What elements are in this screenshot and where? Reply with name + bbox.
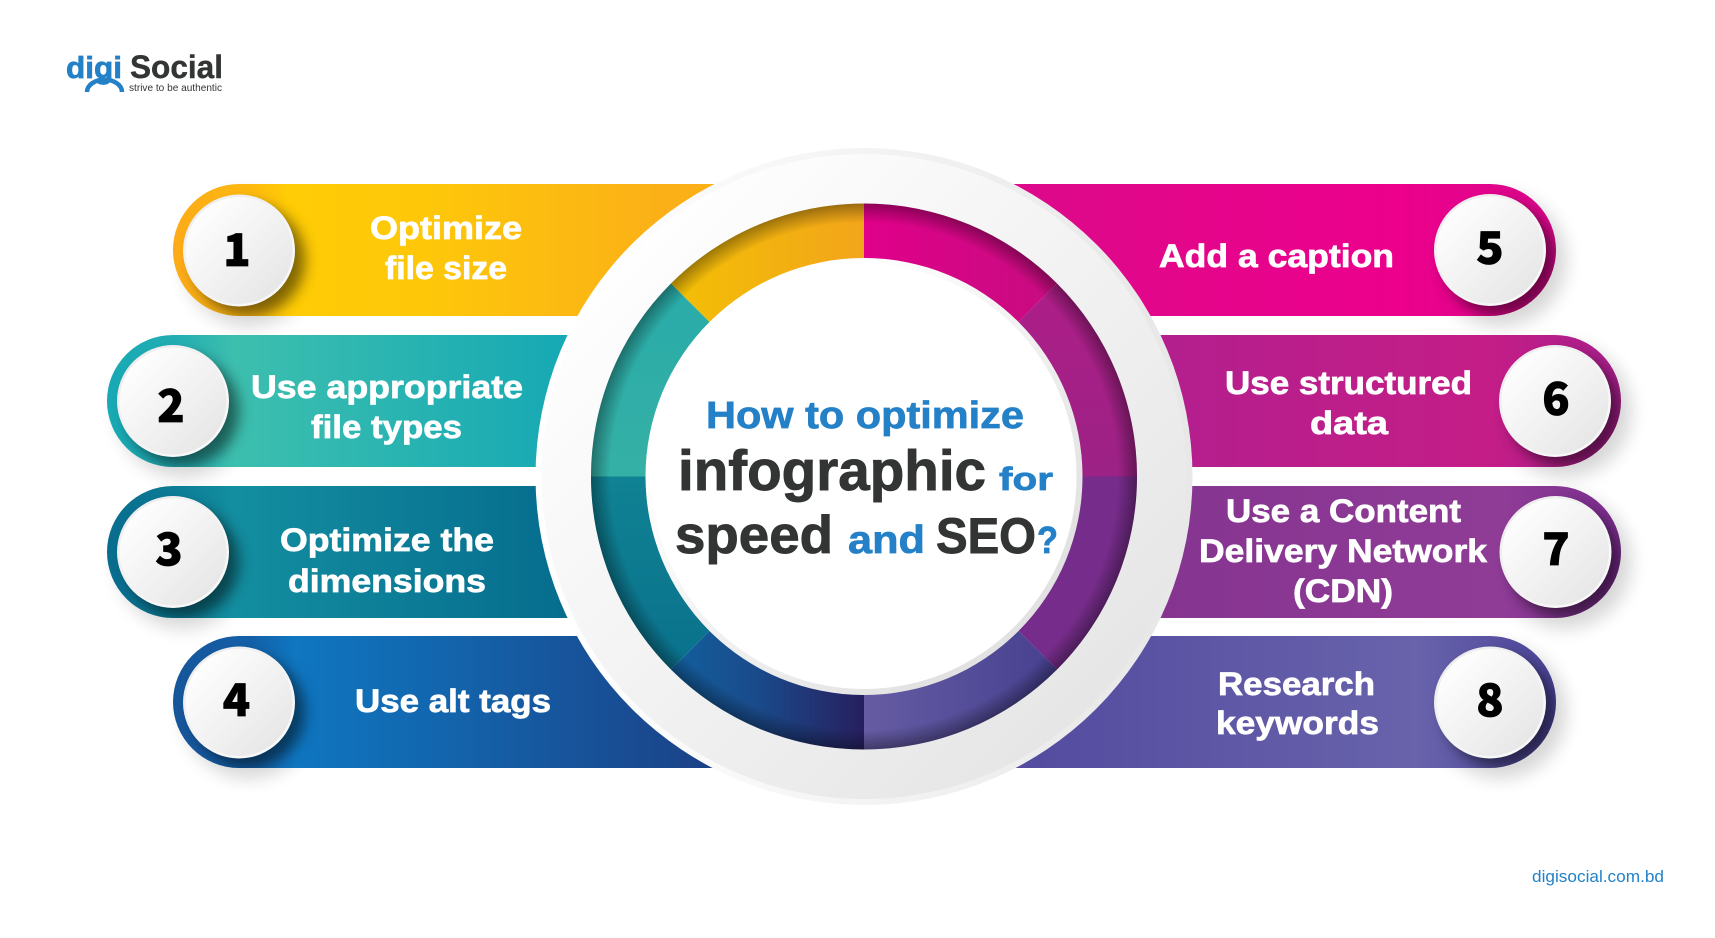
title: How to optimize infographic for speed and SEO?: for: [999, 461, 1053, 497]
label: Research keywords: [1216, 666, 1379, 741]
label: Use appropriate file types: [251, 369, 523, 445]
number badge 7: [1500, 496, 1612, 608]
inner white circle: [646, 258, 1082, 695]
pill 6: Use structured data: [1150, 335, 1631, 477]
number badge 4: [183, 646, 295, 758]
logo icon: person arc: [87, 80, 122, 92]
title: How to optimize infographic for speed and SEO?: speed: [675, 506, 833, 565]
number badge 8: [1434, 646, 1546, 758]
number badge 2: [117, 345, 229, 457]
number badge 5: [1434, 194, 1546, 306]
label: Use appropriate file types: file types: [311, 409, 462, 445]
number badge 1: 1: [223, 214, 251, 279]
pill 4: Use alt tags: [173, 636, 725, 778]
number badge 4: 4: [223, 664, 250, 729]
title: How to optimize infographic for speed and SEO?: [675, 395, 1058, 565]
number badge 7: 7: [1542, 513, 1570, 578]
number badge 5: 5: [1476, 212, 1504, 277]
pill 1: Optimize file size: [173, 184, 725, 326]
logo wordmark: Social: Social: [130, 49, 223, 85]
label: Optimize file size: file size: [385, 250, 507, 286]
title: How to optimize infographic for speed and SEO?: SEO: [936, 508, 1036, 564]
label: Use a Content Delivery Network (CDN): (CDN): [1293, 573, 1393, 609]
title: How to optimize infographic for speed and SEO?: infographic: [678, 439, 986, 503]
title: How to optimize infographic for speed and SEO?: How to optimize: [706, 395, 1024, 437]
label: Use structured data: [1225, 365, 1472, 441]
pill 5: Add a caption: [1000, 184, 1566, 326]
label: Optimize the dimensions: Optimize the: [280, 522, 494, 558]
number badge 6: 6: [1542, 363, 1570, 428]
number badge 8: 8: [1476, 664, 1504, 730]
number badge 6: [1499, 345, 1611, 457]
label: Research keywords: keywords: [1216, 705, 1379, 741]
pill 7: Use a Content Delivery Network (CDN): [1150, 486, 1631, 628]
label: Research keywords: Research: [1218, 666, 1375, 702]
label: Use structured data: Use structured: [1225, 365, 1472, 401]
logo wordmark: digi: digi: [66, 50, 122, 85]
label: Use appropriate file types: Use appropriate: [251, 369, 523, 405]
title: How to optimize infographic for speed and SEO?: and: [848, 519, 925, 562]
label: Use a Content Delivery Network (CDN): [1199, 493, 1487, 609]
footer url: digisocial.com.bd: [1532, 867, 1664, 886]
central disc with segmented ring: [536, 148, 1192, 805]
number badge 1: [183, 194, 295, 306]
label: Add a caption: Add a caption: [1159, 238, 1394, 274]
logo: digi Social: [66, 49, 223, 94]
label: Use alt tags: Use alt tags: [355, 683, 551, 719]
label: Use structured data: data: [1310, 405, 1388, 441]
label: Use a Content Delivery Network (CDN): Use a Content: [1226, 493, 1461, 529]
pill 2: Use appropriate file types: [107, 335, 575, 477]
pill 3: Optimize the dimensions: [107, 486, 575, 628]
logo tagline: strive to be authentic: [129, 82, 222, 94]
number badge 3: [117, 496, 229, 608]
label: Optimize the dimensions: dimensions: [288, 563, 486, 599]
number badge 2: 2: [157, 370, 185, 435]
label: Optimize file size: [370, 210, 522, 286]
pill 8: Research keywords: [1000, 636, 1566, 778]
label: Optimize the dimensions: [280, 522, 494, 599]
number badge 3: 3: [155, 514, 183, 578]
ring of eight coloured segments: [591, 203, 1137, 750]
label: Optimize file size: Optimize: [370, 210, 522, 246]
label: Use a Content Delivery Network (CDN): Delivery Network: [1199, 533, 1487, 569]
title: How to optimize infographic for speed and SEO?: ?: [1037, 520, 1058, 562]
